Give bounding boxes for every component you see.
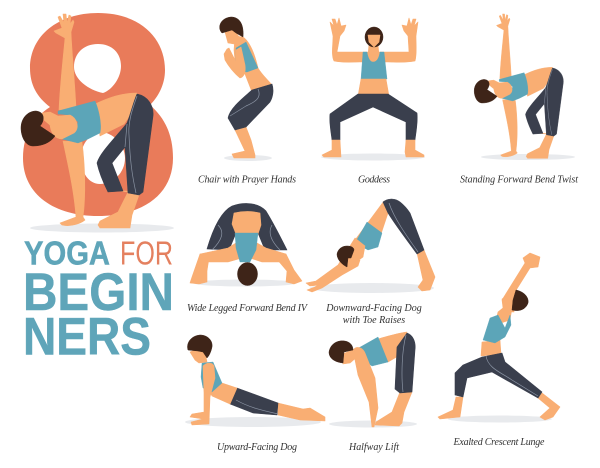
caption: standing forward bend twist: Standing Forward Bend Twist xyxy=(460,174,578,186)
pose: exalted crescent lunge xyxy=(438,253,560,422)
caption: chair with prayer hands: Chair with Prayer Hands xyxy=(198,174,296,186)
title: yoga for beginners: FOR xyxy=(120,234,173,272)
caption: downward-facing dog with toe raises: Downward-Facing Dog xyxy=(325,303,422,314)
caption: upward-facing dog: Upward-Facing Dog xyxy=(217,442,297,453)
caption: goddess: Goddess xyxy=(358,174,390,186)
title: yoga for beginners: BEGIN xyxy=(23,263,174,322)
main figure: standing forward bend twist xyxy=(21,14,153,228)
pose: upward-facing dog xyxy=(185,335,325,427)
caption: halfway lift: Halfway Lift xyxy=(348,442,399,453)
title: yoga for beginners: NERS xyxy=(23,308,151,366)
pose: goddess xyxy=(321,18,425,160)
pose: downward-facing dog with toe raises xyxy=(306,199,435,293)
title: yoga for beginners xyxy=(23,234,174,366)
pose: chair with prayer hands xyxy=(220,17,273,161)
pose: wide legged forward bend xyxy=(190,203,302,286)
caption: exalted crescent lunge: Exalted Crescent Lunge xyxy=(452,437,545,448)
caption: downward-facing dog with toe raises: with Toe Raises xyxy=(343,315,405,326)
big number 8 xyxy=(23,13,174,232)
title: yoga for beginners: YOGA xyxy=(24,234,110,272)
pose: standing forward bend twist xyxy=(474,14,575,160)
pose: halfway lift xyxy=(329,332,417,428)
caption: wide legged forward bend iv: Wide Legged Forward Bend IV xyxy=(187,303,309,314)
